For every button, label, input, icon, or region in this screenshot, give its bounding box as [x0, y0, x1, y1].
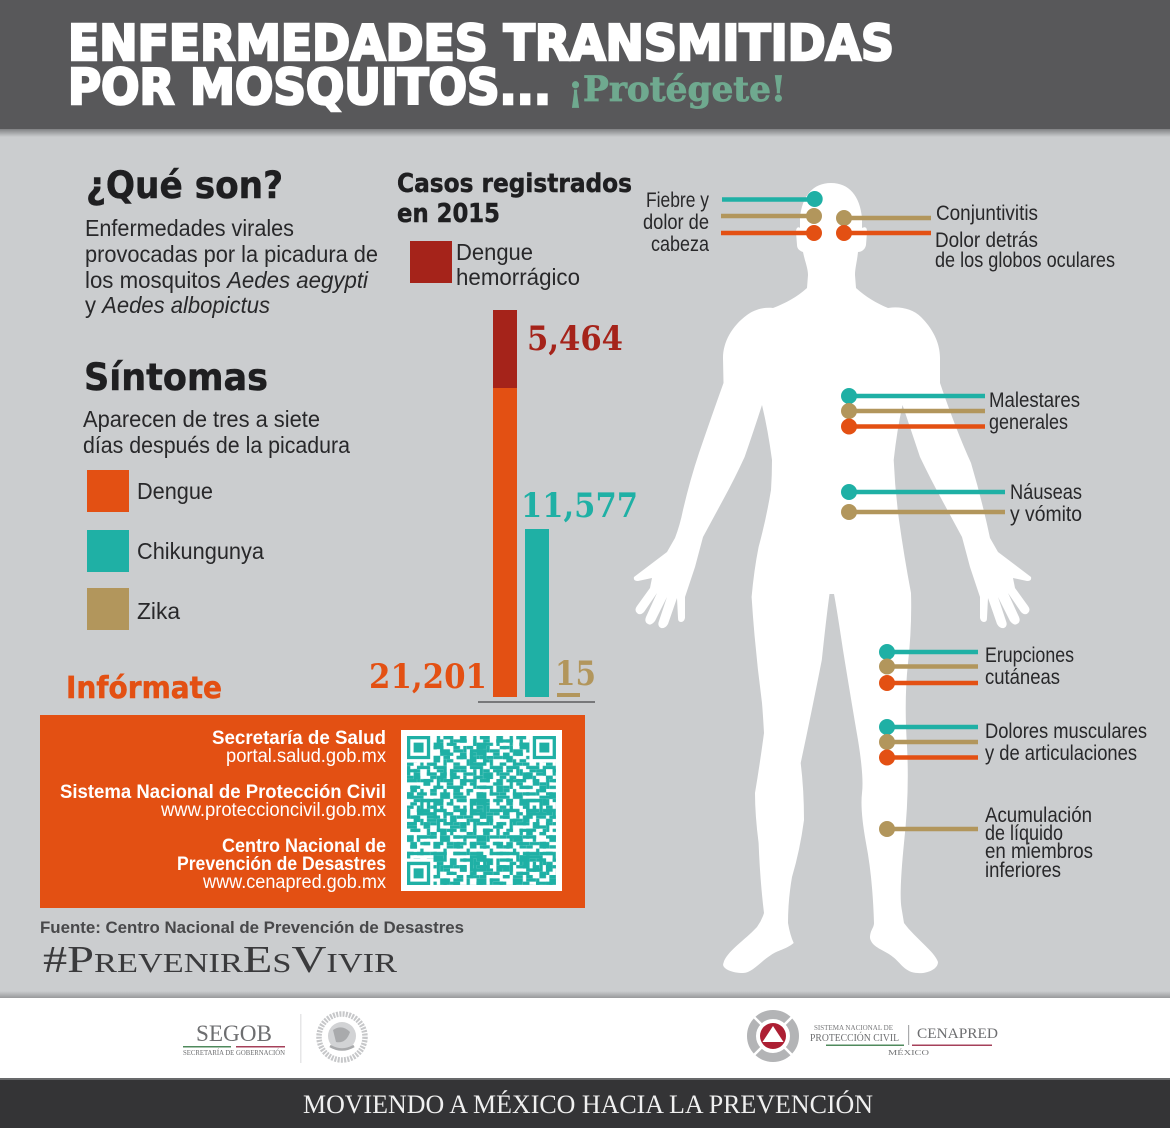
- symptom: acumulación de líquido: de líquido: [985, 822, 1063, 845]
- text: symptoms intro: [83, 406, 350, 458]
- logo: SEGOB: SECRETARÍA DE GOBERNACIÓN: [183, 1049, 285, 1057]
- footer slogan band: [0, 1078, 1170, 1128]
- footer slogan band: MOVIENDO A MÉXICO HACIA LA PREVENCIÓN: [303, 1090, 873, 1119]
- text: definition: provocadas por la picadura de: [85, 241, 378, 267]
- logo: sistema nacional de protección civil: SISTEMA NACIONAL DE: [814, 1023, 893, 1032]
- symptom: náuseas y vómito: y vómito: [1010, 503, 1082, 526]
- text: definition: y Aedes albopictus: [85, 292, 270, 318]
- legend: dengue hemorrágico: hemorrágico: [456, 264, 580, 290]
- legend: chikungunya: Chikungunya: [137, 538, 264, 564]
- panel: contacts: [40, 715, 585, 908]
- symptom: malestares generales: generales: [989, 411, 1068, 434]
- symptom: conjuntivitis: Conjuntivitis: [936, 202, 1038, 225]
- human body silhouette: [634, 183, 1031, 973]
- symptom: erupciones cutáneas: [879, 644, 1074, 691]
- symptom: acumulación de líquido: Acumulación: [985, 804, 1092, 827]
- logo: national seal: [319, 1014, 365, 1060]
- subtitle: ¡Protégete!: [568, 69, 786, 110]
- contact: cenapred: [177, 836, 386, 893]
- value: 15: 15: [555, 654, 596, 694]
- text: definition: Enfermedades virales: [85, 215, 294, 241]
- title: POR MOSQUITOS...: [68, 59, 551, 116]
- logo: CENAPRED: CENAPRED: [917, 1026, 998, 1042]
- legend: dengue hemorrágico: Dengue: [456, 239, 533, 265]
- symptom: acumulación de líquido: [879, 804, 1093, 882]
- legend: chikungunya: [87, 530, 264, 572]
- value: 5,464: 5,464: [527, 319, 623, 359]
- contact: protección civil: [60, 782, 386, 821]
- heading: casos registrados: en 2015: [397, 199, 500, 229]
- bar: chikungunya: [525, 529, 549, 697]
- heading: qué son: ¿Qué son?: [86, 164, 283, 207]
- symptom: erupciones cutáneas: Erupciones: [985, 644, 1074, 667]
- symptom: erupciones cutáneas: cutáneas: [985, 666, 1060, 689]
- symptom: náuseas y vómito: [841, 481, 1082, 526]
- bar: dengue: [493, 388, 517, 697]
- symptom: fiebre y dolor de cabeza: cabeza: [651, 233, 709, 256]
- symptom: acumulación de líquido: inferiores: [985, 859, 1061, 882]
- symptom: fiebre y dolor de cabeza: Fiebre y: [646, 189, 709, 212]
- value: 11,577: 11,577: [521, 486, 638, 526]
- contact: secretaría de salud: Secretaría de Salud: [212, 728, 386, 749]
- heading: casos registrados: [397, 169, 632, 229]
- symptom: dolores musculares: y de articulaciones: [985, 742, 1137, 765]
- text: definition: los mosquitos Aedes aegypti: [85, 267, 369, 293]
- symptom: dolor detrás de los globos oculares: de los globos oculares: [935, 249, 1115, 272]
- logo: sistema nacional de protección civil: MÉXICO: [888, 1049, 929, 1057]
- heading: síntomas: Síntomas: [84, 356, 268, 399]
- text: symptoms intro: Aparecen de tres a siete: [83, 406, 320, 432]
- legend: dengue: [87, 470, 213, 512]
- symptom: dolor detrás de los globos oculares: [836, 225, 1115, 272]
- logo: sistema nacional de protección civil: [810, 1023, 929, 1057]
- symptom: malestares generales: [841, 388, 1080, 434]
- footer logos band: [0, 991, 1170, 1079]
- logo: SEGOB: [183, 1021, 285, 1057]
- symptom: dolores musculares: Dolores musculares: [985, 720, 1147, 743]
- bar: zika: [557, 693, 580, 697]
- bar: dengue hemorrágico: [493, 310, 517, 388]
- contact: secretaría de salud: [212, 728, 386, 767]
- symptom: dolor detrás de los globos oculares: Dolor detrás: [935, 229, 1038, 252]
- heading: infórmate: Infórmate: [66, 671, 222, 706]
- contact: secretaría de salud: portal.salud.gob.mx: [226, 746, 386, 767]
- text: symptoms intro: días después de la picadura: [83, 432, 350, 458]
- contact: cenapred: www.cenapred.gob.mx: [202, 872, 386, 893]
- value: 21,201: 21,201: [369, 657, 487, 697]
- contact: cenapred: Centro Nacional de: [222, 836, 386, 857]
- legend: dengue: Dengue: [137, 478, 213, 504]
- symptom: malestares generales: Malestares: [989, 389, 1080, 412]
- symptom: fiebre y dolor de cabeza: [643, 189, 823, 256]
- legend: dengue hemorrágico: [410, 239, 580, 290]
- symptom: conjuntivitis: [836, 202, 1038, 226]
- logo: sistema nacional de protección civil: PROTECCIÓN CIVIL: [810, 1032, 899, 1044]
- symptom: fiebre y dolor de cabeza: dolor de: [643, 211, 709, 234]
- QR code: [401, 730, 562, 891]
- text: definition: [85, 215, 378, 318]
- legend: zika: Zika: [137, 598, 180, 624]
- bar chart: [369, 310, 638, 703]
- title: ENFERMEDADES TRANSMITIDAS: [68, 15, 894, 72]
- symptom: acumulación de líquido: en miembros: [985, 840, 1093, 863]
- logo: SEGOB: SEGOB: [196, 1021, 272, 1046]
- source: Fuente: Centro Nacional de Prevención de Desastres: [40, 918, 464, 937]
- title: [68, 15, 894, 116]
- symptom: náuseas y vómito: Náuseas: [1010, 481, 1082, 504]
- contact: protección civil: Sistema Nacional de Protección Civil: [60, 782, 386, 803]
- contact: cenapred: Prevención de Desastres: [177, 854, 386, 875]
- heading: casos registrados: Casos registrados: [397, 169, 632, 199]
- header band: [0, 0, 1170, 137]
- symptom: dolores musculares: [879, 719, 1147, 766]
- logo: protección civil emblem: [752, 1014, 794, 1058]
- contact: protección civil: www.proteccioncivil.gob.mx: [160, 800, 386, 821]
- legend: zika: [87, 588, 180, 630]
- hashtag: #PrevenirEsVivir: [43, 939, 397, 981]
- legend: [87, 470, 264, 630]
